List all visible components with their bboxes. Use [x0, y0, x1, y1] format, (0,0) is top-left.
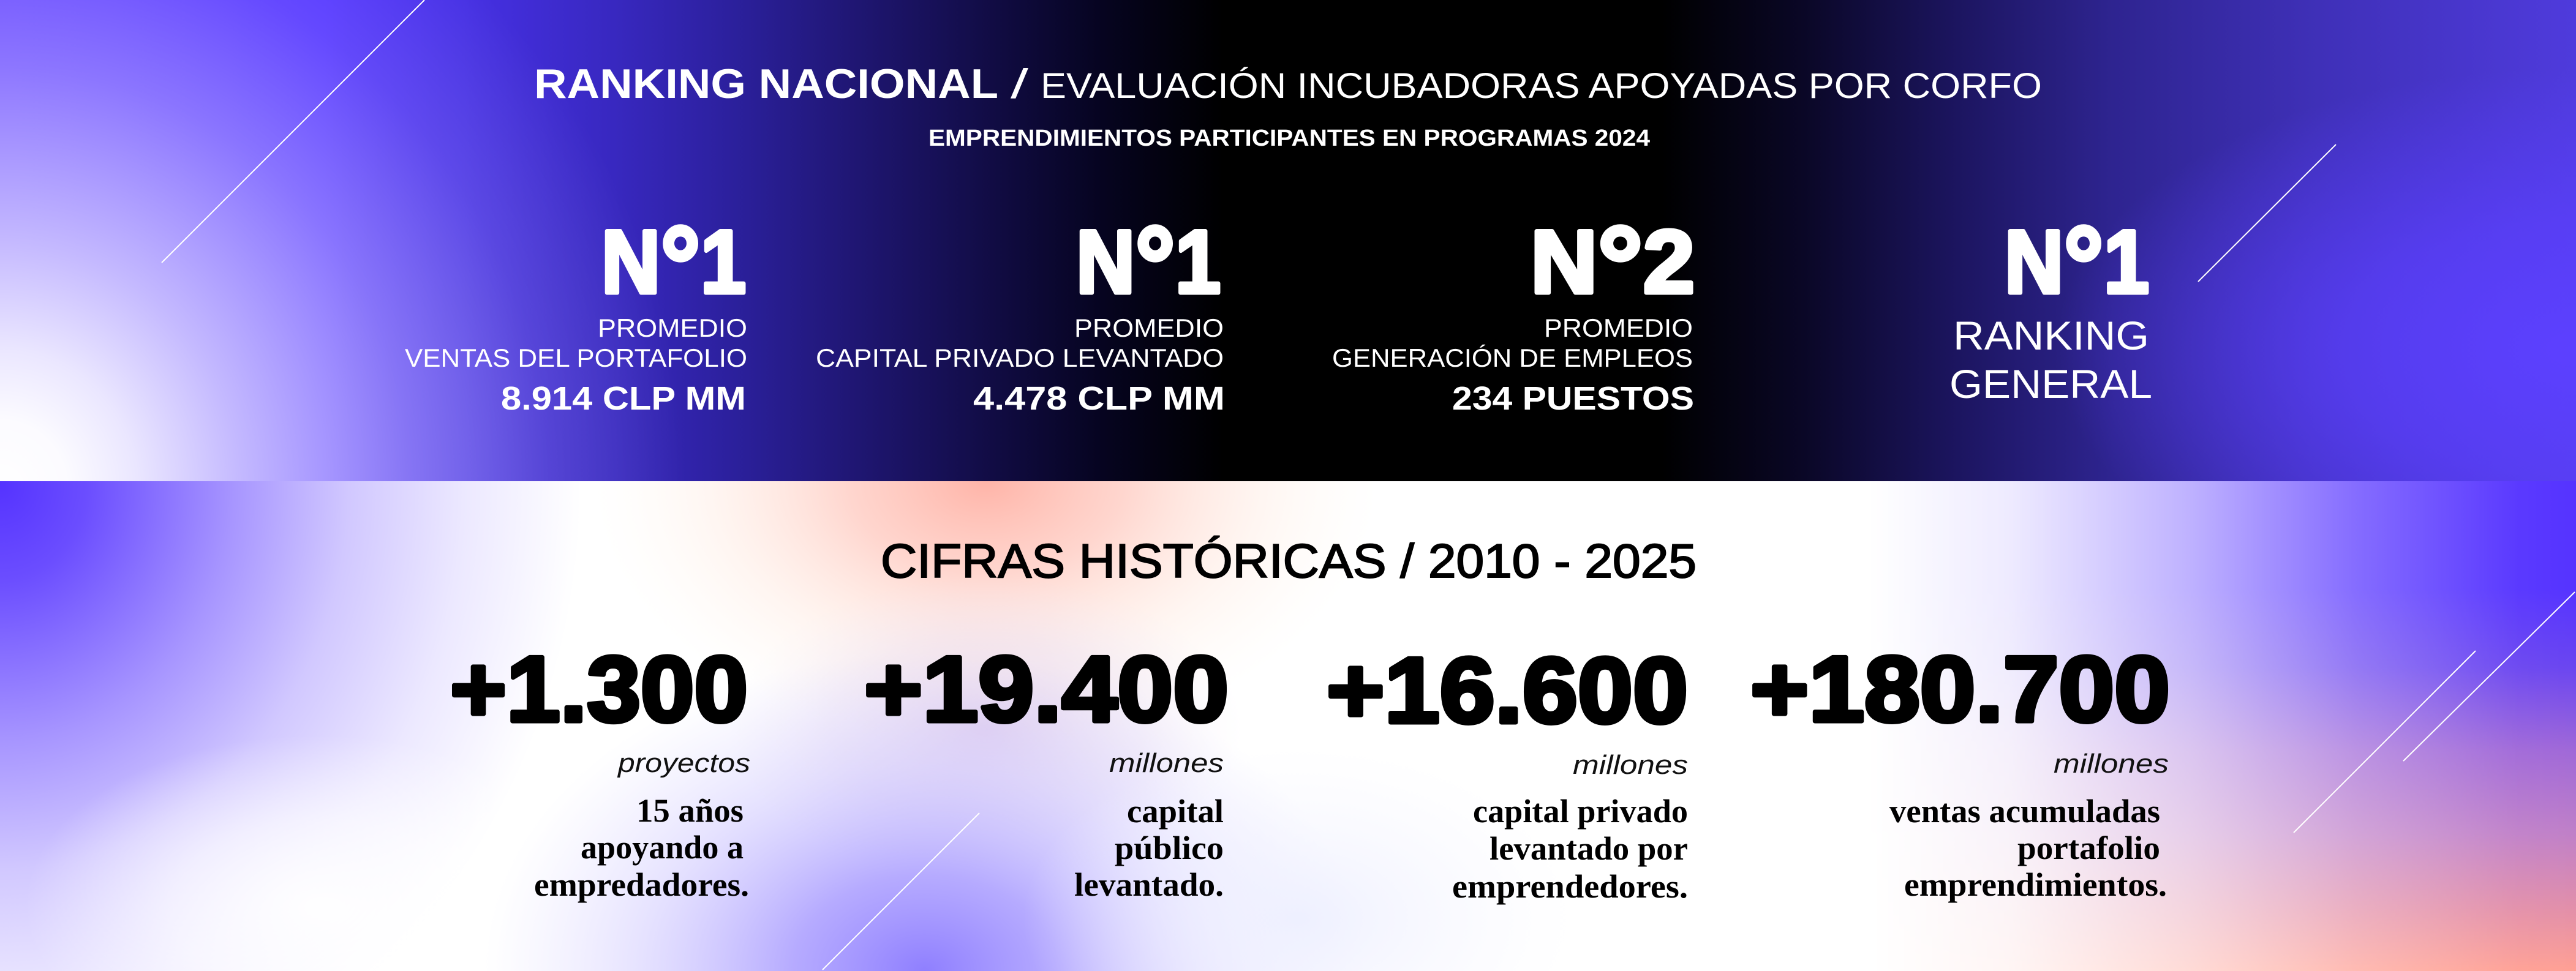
stat: capital privado — [1327, 639, 1688, 905]
stat: capital privado levantado: PROMEDIO — [1074, 313, 1224, 342]
stat: capital publico: capital — [1127, 793, 1224, 830]
decorative diagonal line top left — [162, 0, 424, 263]
decorative diagonal line bottom right outer — [2403, 592, 2575, 761]
stat: capital privado: millones — [1573, 750, 1688, 780]
stat: ventas del portafolio: N — [601, 212, 666, 312]
stat: capital privado levantado: CAPITAL PRIVADO LEVANTADO — [816, 343, 1224, 372]
stat: capital privado levantado: ° — [1135, 204, 1175, 327]
stat: proyectos: 15 años — [636, 792, 744, 829]
stat: capital publico: público — [1115, 830, 1224, 866]
title: EVALUACIÓN INCUBADORAS APOYADAS POR CORFO — [1041, 66, 2042, 106]
stat: ventas del portafolio: PROMEDIO — [598, 313, 747, 342]
stat: ventas del portafolio: VENTAS DEL PORTAFOLIO — [405, 343, 747, 372]
stat: generacion de empleos: N — [1531, 212, 1595, 312]
stat: ranking general: GENERAL — [1949, 361, 2152, 407]
stat: ventas del portafolio: 8.914 CLP MM — [501, 380, 746, 417]
stat: ventas del portafolio: 1 — [701, 212, 746, 312]
subtitle: EMPRENDIMIENTOS PARTICIPANTES EN PROGRAMAS 2024 — [928, 126, 1650, 151]
stat: capital privado levantado — [816, 204, 1225, 417]
stat: capital publico: millones — [1109, 748, 1224, 778]
stat: proyectos: apoyando a — [581, 829, 744, 866]
stat: capital privado levantado: 4.478 CLP MM — [973, 380, 1225, 417]
bottom panel gradient background — [0, 481, 2576, 971]
title: / — [1011, 61, 1028, 107]
decorative diagonal line top right — [2198, 144, 2336, 282]
stat: proyectos — [450, 637, 750, 903]
stat: generacion de empleos: PROMEDIO — [1544, 313, 1693, 342]
stat: capital publico: levantado. — [1074, 866, 1224, 903]
stat: capital privado levantado: N — [1076, 212, 1140, 312]
stat: capital privado: capital privado — [1473, 793, 1688, 830]
stat: ventas acumuladas: +180.700 — [1750, 637, 2170, 741]
stat: ventas acumuladas: emprendimientos. — [1904, 866, 2167, 903]
stat: ventas del portafolio: ° — [660, 204, 701, 327]
stat: ranking general: 1 — [2104, 212, 2149, 312]
decorative diagonal line bottom center — [823, 813, 979, 970]
stat: proyectos: empredadores. — [534, 866, 749, 903]
title — [534, 61, 2042, 107]
stat: generacion de empleos: ° — [1597, 204, 1643, 327]
stat: proyectos: proyectos — [617, 748, 750, 778]
stat: ranking general — [1949, 204, 2152, 407]
stat: capital privado levantado: 1 — [1175, 212, 1221, 312]
decorative diagonal line bottom right inner — [2294, 651, 2476, 833]
title: RANKING NACIONAL — [534, 61, 998, 107]
stat: ranking general: N — [2005, 212, 2069, 312]
stat: capital publico: +19.400 — [864, 637, 1229, 741]
stat: ventas del portafolio — [405, 204, 747, 417]
stat: ventas acumuladas: millones — [2054, 749, 2169, 779]
stat: ventas acumuladas — [1750, 637, 2170, 903]
panel: ranking nacional — [0, 0, 2576, 481]
stat: generacion de empleos — [1332, 204, 1695, 417]
stat: generacion de empleos: 234 PUESTOS — [1452, 380, 1694, 417]
panel: cifras historicas — [0, 481, 2576, 971]
heading: CIFRAS HISTÓRICAS / 2010 - 2025 — [881, 534, 1697, 588]
stat: capital privado: levantado por — [1489, 830, 1688, 867]
stat: capital privado: +16.600 — [1327, 639, 1688, 743]
stat: ventas acumuladas: portafolio — [2017, 830, 2160, 866]
stat: capital privado: emprendedores. — [1452, 868, 1688, 905]
stat: ranking general: RANKING — [1953, 313, 2149, 358]
stat: proyectos: +1.300 — [450, 637, 748, 741]
stat: generacion de empleos: 2 — [1643, 212, 1695, 312]
stat: capital publico — [864, 637, 1229, 903]
stat: ventas acumuladas: ventas acumuladas — [1889, 793, 2160, 830]
top panel gradient background — [0, 0, 2576, 481]
stat: generacion de empleos: GENERACIÓN DE EMPLEOS — [1332, 343, 1693, 372]
stat: ranking general: ° — [2063, 204, 2104, 327]
